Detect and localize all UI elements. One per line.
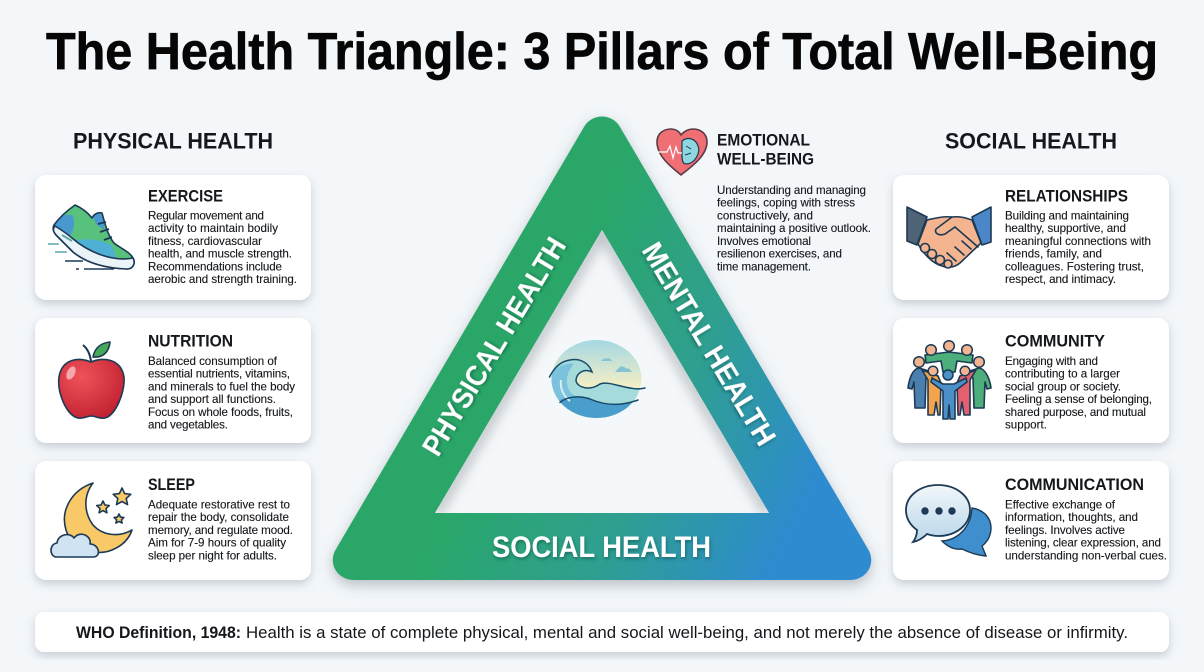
emotional text: resilienon exercises, and [717, 248, 842, 261]
label: social health: SOCIAL HEALTH [492, 531, 711, 564]
exercise text: EXERCISE [148, 187, 223, 206]
community text [1005, 332, 1152, 432]
community text: Feeling a sense of belonging, [1005, 393, 1152, 406]
nutrition text: and minerals to fuel the body [148, 380, 295, 394]
title: The Health Triangle: 3 Pillars of Total Well-Being [46, 23, 1158, 81]
icon: running shoe [48, 205, 134, 269]
communication text [1005, 475, 1167, 562]
emotional text: maintaining a positive outlook. [717, 222, 871, 235]
nutrition text: and vegetables. [148, 419, 228, 432]
panel: nutrition [35, 318, 311, 443]
community text: shared purpose, and mutual [1005, 406, 1146, 419]
icon: speech bubbles [906, 485, 991, 556]
nutrition text: and support all functions. [148, 393, 276, 406]
panel: relationships [893, 175, 1169, 300]
emotional text [717, 184, 871, 274]
exercise text: aerobic and strength training. [148, 273, 297, 286]
exercise text: Recommendations include [148, 260, 282, 273]
nutrition text [148, 332, 295, 432]
exercise text: fitness, cardiovascular [148, 235, 262, 248]
nutrition text: essential nutrients, vitamins, [148, 368, 290, 381]
nutrition text: Focus on whole foods, fruits, [148, 406, 293, 419]
relationships text: RELATIONSHIPS [1005, 187, 1128, 206]
relationships text: friends, family, and [1005, 248, 1102, 260]
panel: exercise [35, 175, 311, 300]
triangle band [333, 116, 871, 580]
panel: communication [893, 461, 1169, 580]
relationships text: meaningful connections with [1005, 235, 1151, 248]
panel: community [893, 318, 1169, 443]
emotional heading [717, 131, 814, 168]
icon: group of people [908, 341, 991, 419]
sleep text [148, 475, 293, 562]
emotional text: Involves emotional [717, 235, 811, 248]
heading: social health: SOCIAL HEALTH [945, 128, 1117, 154]
emotional text: time management. [717, 260, 811, 274]
communication text: information, thoughts, and [1005, 511, 1138, 524]
footer: WHO definition: Health is a state of complete physical, mental and social well-being, and not merely the absence of disease or infirmity. [246, 624, 1128, 642]
panel: sleep [35, 461, 311, 580]
footer: WHO definition: WHO Definition, 1948: [76, 624, 241, 642]
nutrition text: Balanced consumption of [148, 355, 278, 368]
communication text: COMMUNICATION [1005, 475, 1144, 494]
footer: WHO definition [35, 612, 1169, 652]
communication text: listening, clear expression, and [1005, 536, 1161, 550]
relationships text [1005, 187, 1151, 286]
relationships text: Building and maintaining [1005, 209, 1129, 222]
sleep text: memory, and regulate mood. [148, 524, 293, 537]
communication text: Effective exchange of [1005, 498, 1116, 511]
triangle diagram [333, 116, 871, 580]
emotional text: feelings, coping with stress [717, 197, 855, 210]
label: mental health: MENTAL HEALTH [635, 237, 781, 452]
icon: apple [59, 342, 124, 418]
relationships text: colleagues. Fostering trust, [1005, 260, 1144, 273]
communication text: understanding non-verbal cues. [1005, 549, 1167, 562]
community text: support. [1005, 419, 1047, 432]
exercise text: health, and muscle strength. [148, 248, 292, 260]
emotional text: Understanding and managing [717, 184, 866, 197]
exercise text: activity to maintain bodily [148, 222, 278, 235]
communication text: feelings. Involves active [1005, 524, 1125, 537]
community text: COMMUNITY [1005, 332, 1105, 351]
community text: social group or society. [1005, 380, 1121, 394]
emotional heading: EMOTIONAL [717, 131, 810, 150]
relationships text: respect, and intimacy. [1005, 273, 1116, 286]
icon: handshake [907, 207, 991, 268]
emotional heading: WELL-BEING [717, 149, 814, 168]
community text: contributing to a larger [1005, 368, 1120, 381]
triangle interior [430, 225, 775, 517]
sleep text: Aim for 7-9 hours of quality [148, 536, 286, 550]
emotional text: constructively, and [717, 210, 813, 222]
sleep text: Adequate restorative rest to [148, 498, 290, 511]
sleep text: SLEEP [148, 475, 195, 494]
label: physical health: PHYSICAL HEALTH [417, 232, 573, 462]
icon: heart with brain [657, 129, 707, 175]
exercise text: Regular movement and [148, 209, 264, 222]
nutrition text: NUTRITION [148, 332, 233, 351]
sleep text: sleep per night for adults. [148, 549, 277, 562]
community text: Engaging with and [1005, 355, 1098, 368]
icon: ocean wave [548, 340, 646, 418]
exercise text [148, 187, 297, 286]
relationships text: healthy, supportive, and [1005, 222, 1126, 235]
sleep text: repair the body, consolidate [148, 511, 289, 524]
heading: physical health: PHYSICAL HEALTH [73, 128, 273, 154]
panel: emotional well-being [657, 129, 871, 274]
icon: moon, stars and cloud [51, 483, 132, 557]
